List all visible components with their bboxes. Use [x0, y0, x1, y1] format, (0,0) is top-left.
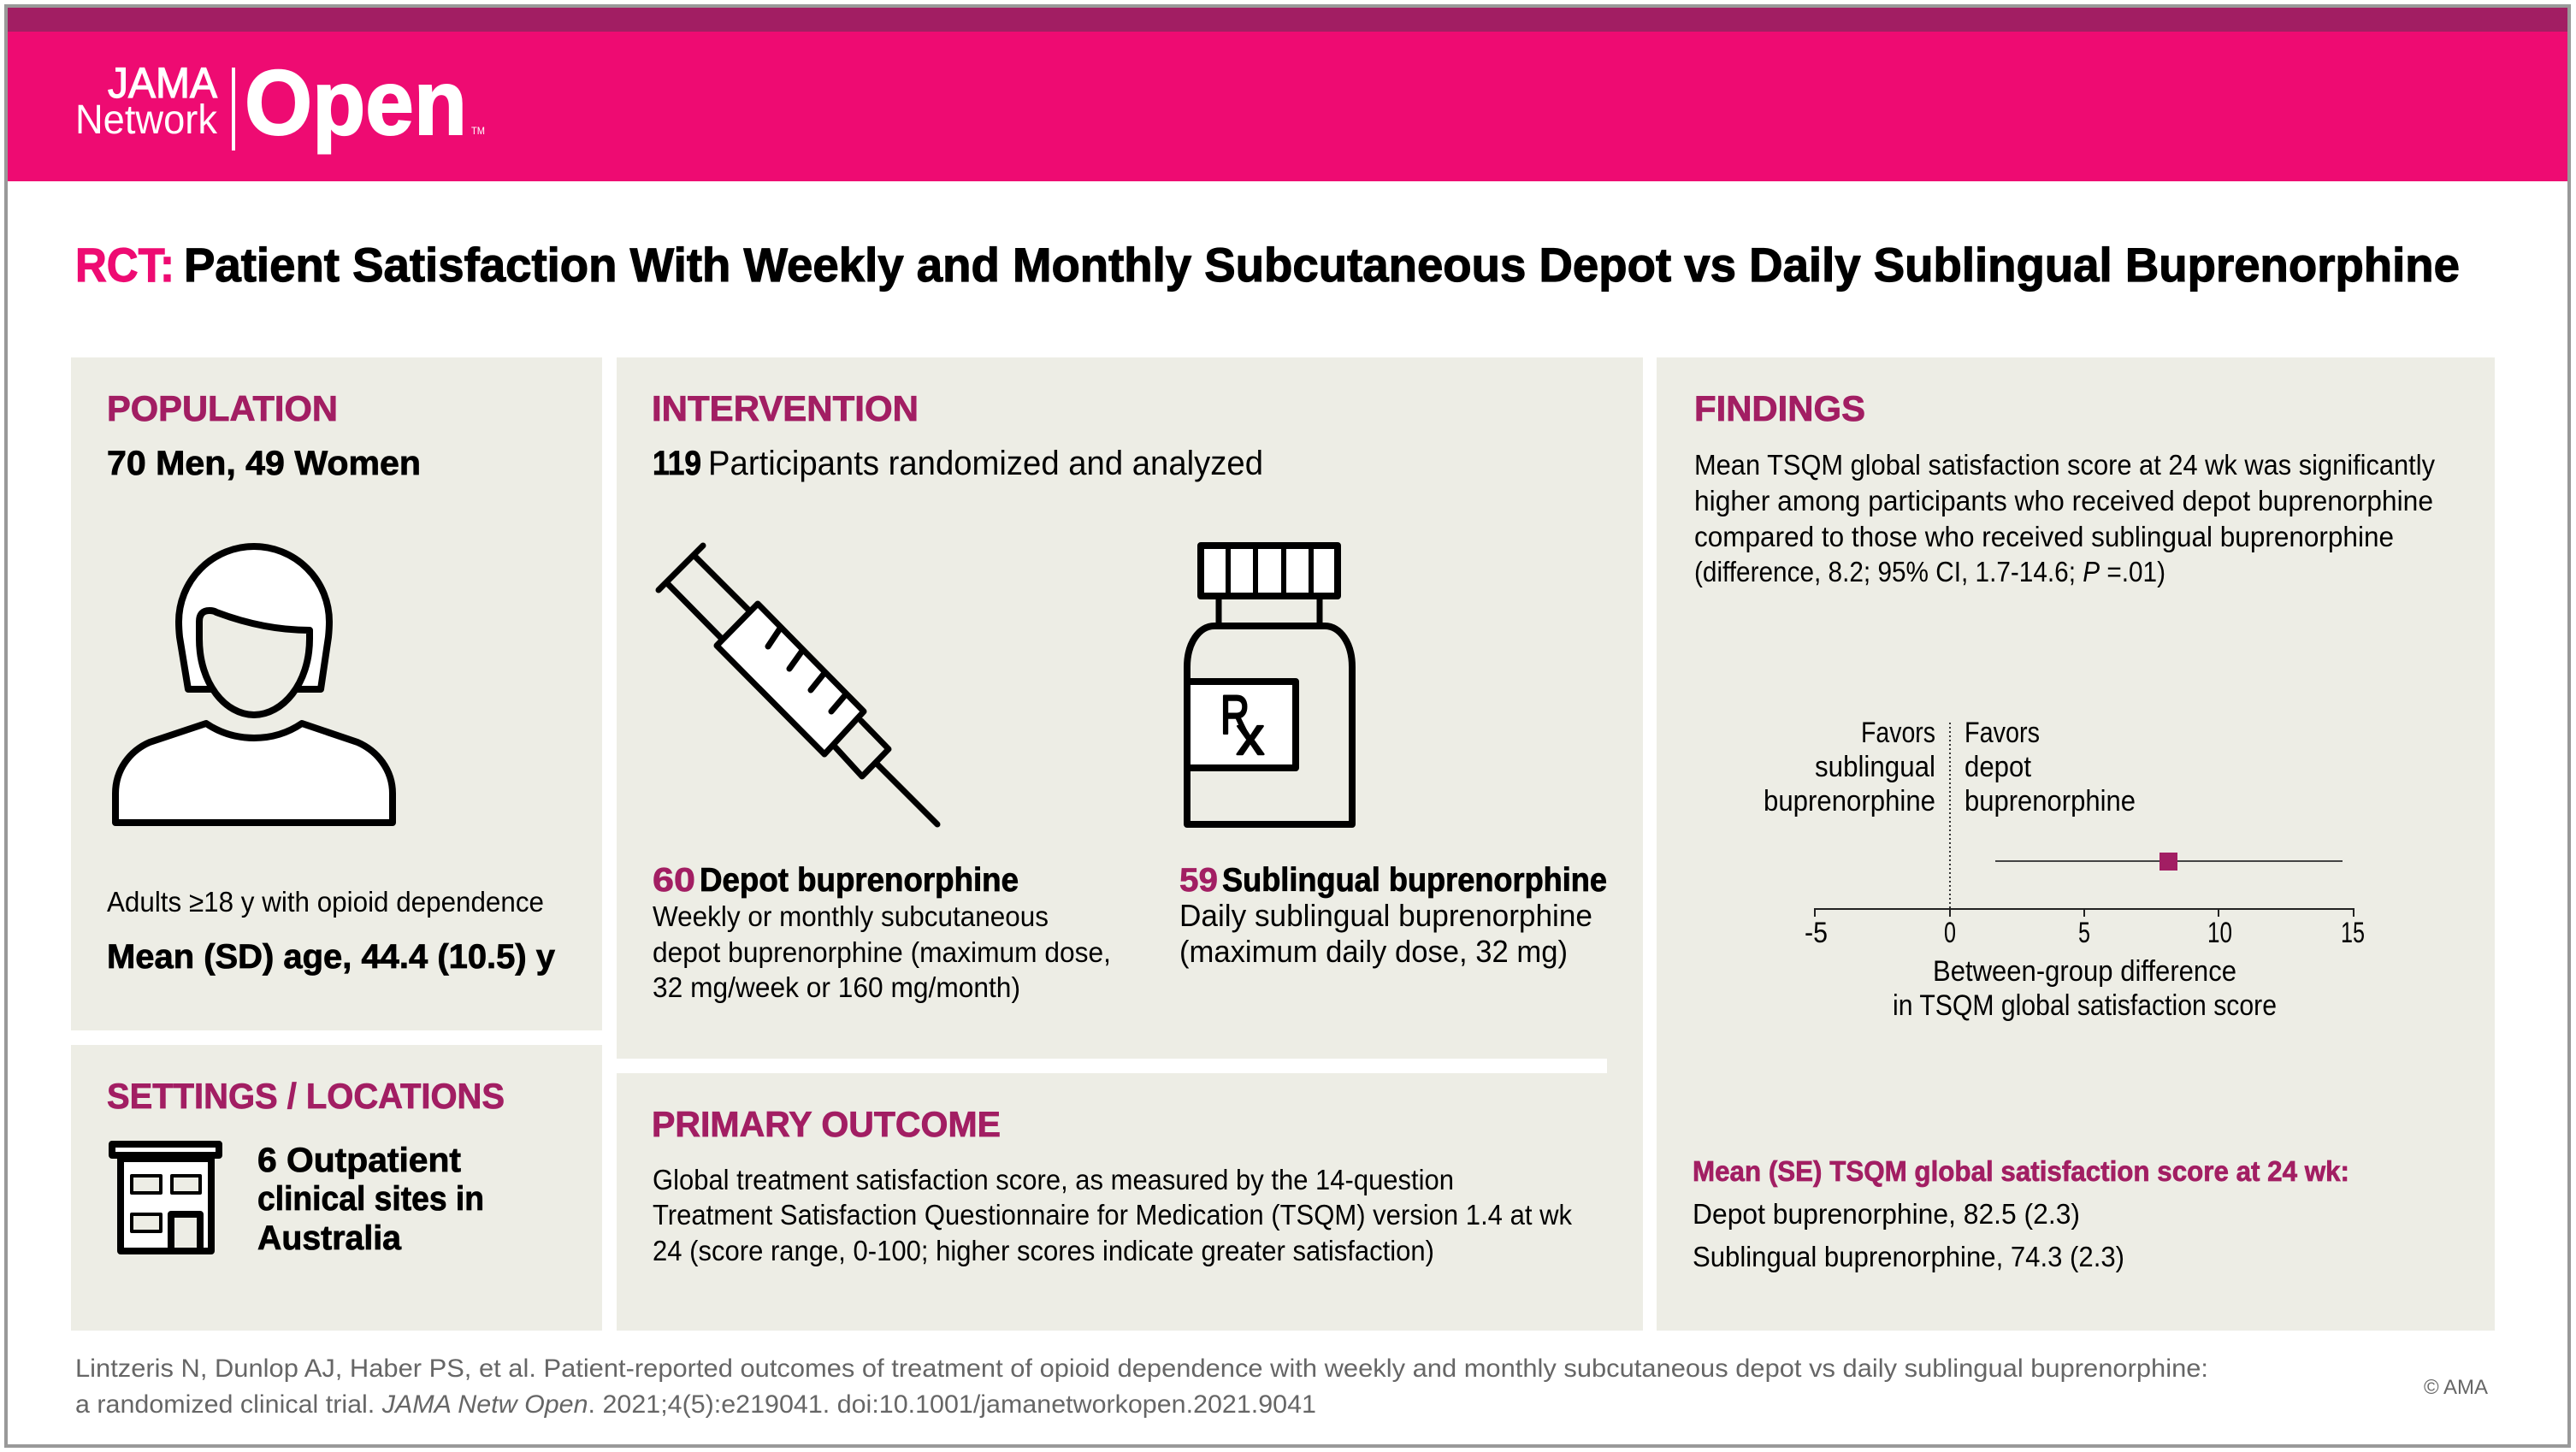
logo: JAMA Network Open: Open [245, 50, 467, 154]
findings summary: Mean TSQM global satisfaction score at 24 wk was significantly [1694, 449, 2435, 481]
findings summary: compared to those who received sublingual buprenorphine [1694, 521, 2394, 552]
heading: population: POPULATION [107, 388, 338, 428]
logo: JAMA Network Open: Network [75, 97, 218, 143]
favors sublingual label: buprenorphine [1764, 785, 1935, 817]
title: RCT: [75, 238, 174, 292]
depot group: depot buprenorphine (maximum dose, [653, 936, 1111, 968]
x axis [1805, 909, 2365, 949]
participants randomized: Participants randomized and analyzed [708, 445, 1263, 482]
mean scores: Mean (SE) TSQM global satisfaction score at 24 wk: [1693, 1155, 2349, 1187]
copyright: © AMA [2424, 1376, 2488, 1399]
panel: primary outcome [617, 1059, 1643, 1331]
favors depot label: buprenorphine [1964, 785, 2136, 817]
axis title: Between-group difference [1933, 955, 2236, 988]
citation: Lintzeris N, Dunlop AJ, Haber PS, et al. Patient-reported outcomes of treatment of opioid dependence with weekly and monthly subcutaneous depot vs daily sublingual buprenorphine: [75, 1355, 2208, 1383]
icon: person [115, 546, 393, 823]
eligibility text: Adults ≥18 y with opioid dependence [107, 886, 544, 918]
depot group: Weekly or monthly subcutaneous [653, 900, 1049, 932]
sublingual group: 59 [1179, 862, 1218, 899]
outcome description: 24 (score range, 0-100; higher scores indicate greater satisfaction) [653, 1235, 1434, 1266]
panel: settings and locations [71, 1045, 602, 1331]
favors depot label: Favors [1964, 717, 2040, 749]
panel: intervention [617, 357, 1643, 1072]
favors sublingual label: sublingual [1815, 751, 1935, 783]
x axis: -5 [1805, 917, 1828, 949]
icon: prescription bottle: R [1220, 684, 1250, 746]
citation [75, 1355, 2208, 1419]
sites text: clinical sites in [257, 1180, 484, 1218]
heading: primary outcome: PRIMARY OUTCOME [652, 1104, 1001, 1144]
panel: findings [1657, 357, 2495, 1331]
participants randomized: 119 [653, 445, 701, 482]
mean scores: Depot buprenorphine, 82.5 (2.3) [1693, 1198, 2080, 1230]
sites text: Australia [257, 1219, 402, 1257]
sublingual group: Sublingual buprenorphine [1222, 862, 1607, 899]
x axis: 5 [2078, 917, 2090, 949]
sublingual group: Daily sublingual buprenorphine [1179, 898, 1592, 933]
mean age: Mean (SD) age, 44.4 (10.5) y [107, 938, 556, 976]
depot group: 32 mg/week or 160 mg/month) [653, 971, 1020, 1003]
depot group [653, 862, 1111, 1003]
sublingual group: (maximum daily dose, 32 mg) [1179, 934, 1568, 969]
point estimate and confidence interval [1995, 853, 2343, 871]
logo: JAMA Network Open [75, 50, 485, 154]
axis title: in TSQM global satisfaction score [1893, 989, 2277, 1022]
icon: syringe [659, 546, 937, 824]
mean scores: Sublingual buprenorphine, 74.3 (2.3) [1693, 1241, 2124, 1272]
findings summary: higher among participants who received depot buprenorphine [1694, 485, 2433, 516]
logo: JAMA Network Open: TM [471, 125, 485, 137]
logo: JAMA Network Open: JAMA [108, 59, 218, 107]
outcome description: Treatment Satisfaction Questionnaire for Medication (TSQM) version 1.4 at wk [653, 1199, 1572, 1231]
outcome description [653, 1164, 1572, 1266]
axis title [1893, 955, 2277, 1022]
panel: population [71, 357, 602, 1030]
citation: a randomized clinical trial. JAMA Netw Open. 2021;4(5):e219041. doi:10.1001/jamanetworkopen.2021.9041 [75, 1390, 1316, 1419]
favors sublingual label [1764, 717, 1935, 817]
favors depot label: depot [1964, 751, 2031, 783]
forest plot [1764, 717, 2365, 1022]
sites text [257, 1142, 484, 1257]
depot group: 60 [653, 862, 695, 899]
depot group: Depot buprenorphine [700, 862, 1019, 899]
favors depot label [1964, 717, 2136, 817]
header band with logo [8, 8, 2567, 181]
x axis: 10 [2207, 917, 2232, 949]
x axis: 15 [2341, 917, 2365, 949]
favors sublingual label: Favors [1861, 717, 1935, 749]
participants by sex: 70 Men, 49 Women [107, 445, 421, 482]
icon: prescription bottle: x [1237, 707, 1264, 766]
sublingual group [1179, 862, 1607, 969]
heading: intervention: INTERVENTION [652, 388, 919, 428]
heading: findings: FINDINGS [1694, 388, 1865, 428]
outcome description: Global treatment satisfaction score, as measured by the 14-question [653, 1164, 1454, 1195]
x axis: 0 [1944, 917, 1956, 949]
findings summary [1694, 449, 2435, 587]
title: Patient Satisfaction With Weekly and Monthly Subcutaneous Depot vs Daily Sublingual Buprenorphine [184, 238, 2460, 292]
heading: settings: SETTINGS / LOCATIONS [107, 1076, 505, 1116]
sites text: 6 Outpatient [257, 1142, 461, 1179]
icon: prescription bottle [1187, 546, 1352, 824]
findings summary: (difference, 8.2; 95% CI, 1.7-14.6; P =.01) [1694, 556, 2165, 587]
icon: building [112, 1144, 219, 1251]
mean scores [1693, 1155, 2349, 1272]
